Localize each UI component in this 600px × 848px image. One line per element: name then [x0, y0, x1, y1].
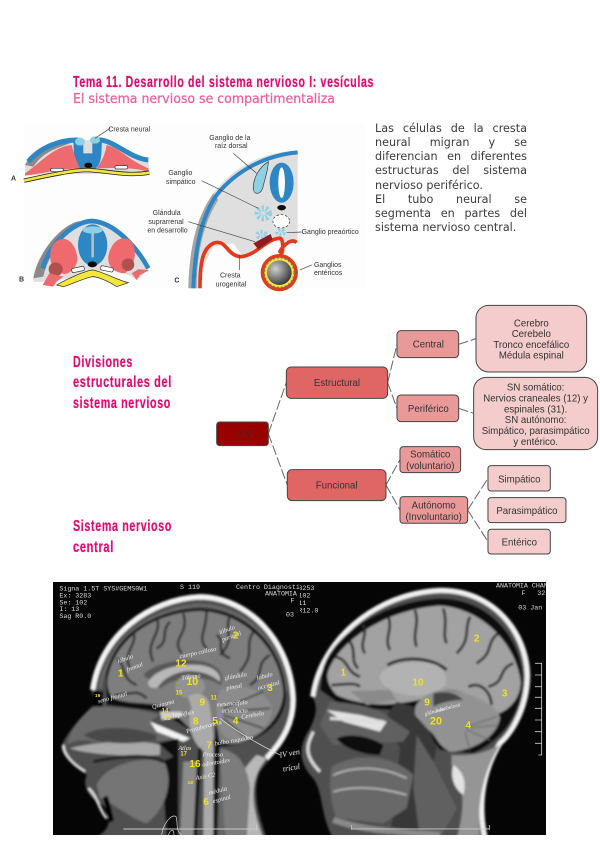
ruler [123, 825, 257, 830]
box: Entérico: Entérico [502, 538, 537, 549]
structure numbers: 17 [180, 752, 188, 758]
box: peripheral nervous system parts [474, 377, 598, 450]
handwritten labels: pineal [225, 682, 243, 692]
handwritten label: glándula [424, 707, 445, 718]
diagram labels: suprarrenal [148, 219, 184, 226]
structure numbers: 10 [186, 676, 198, 688]
box: peripheral nervous system parts: SN somático: [507, 382, 564, 393]
paragraph: neural crest and neural tube: sistema nervioso central. [375, 221, 516, 234]
section heading: divisiones estructurales: estructurales del [73, 374, 172, 391]
section heading: divisiones estructurales: sistema nervioso [73, 395, 171, 412]
handwritten labels: Cerebelo [241, 710, 265, 721]
box: peripheral nervous system parts: Simpático, parasimpático [482, 426, 590, 437]
embryo diagrams: neural crest migration [11, 125, 365, 291]
box: SN [217, 422, 268, 446]
structure numbers: 4 [466, 721, 472, 732]
diagram B [33, 219, 149, 287]
handwritten labels: occipital [257, 679, 280, 692]
structure numbers: 16 [189, 759, 201, 770]
box: Funcional: Funcional [316, 481, 358, 492]
paragraph: neural crest and neural tube: nervioso periférico. [375, 179, 483, 192]
scan header text: F [291, 596, 295, 604]
handwritten labels: acueducto [222, 707, 248, 714]
structure numbers: 19 [95, 693, 101, 699]
diagram labels: Glándula [153, 210, 181, 217]
box: Somático: Somático [410, 449, 450, 460]
title: Tema 11. Desarrollo del sistema nervioso I: vesículas [73, 74, 374, 91]
handwritten labels: Tálamo [181, 672, 201, 682]
box: Estructural [286, 367, 388, 398]
ruler [352, 663, 542, 830]
handwritten labels [97, 624, 305, 805]
box: peripheral nervous system parts: Nervios craneales (12) y [483, 393, 588, 404]
box: Periférico: Periférico [408, 404, 449, 415]
structure numbers: 1 [341, 668, 347, 679]
scan header text: I: 13 [59, 605, 79, 613]
handwritten labels: glándula [224, 671, 248, 682]
structure numbers: 4 [233, 716, 239, 727]
scan header text: Signa 1.5T SYS#GEMS0W1 [59, 585, 147, 593]
handwritten labels: seno frontal [97, 691, 128, 705]
scan header text [300, 583, 546, 612]
handwritten labels: odontoides [202, 757, 231, 769]
scan header text: Centro Diagnostic [236, 583, 304, 591]
diagram labels: B [19, 277, 24, 284]
scan header text: 11 [298, 599, 306, 607]
structure numbers: 6 [203, 797, 209, 808]
scan header text: S 119 [180, 583, 200, 591]
handwritten label [424, 704, 460, 717]
box: Entérico [488, 529, 550, 554]
handwritten labels: hipófisis [172, 709, 195, 720]
box: central nervous system parts: Tronco encefálico [493, 340, 569, 351]
diagram labels: Cresta [220, 272, 241, 279]
section heading: sistema nervioso central: Sistema nervioso [73, 518, 172, 535]
box: Autónomo: Autónomo [412, 500, 456, 511]
box: Parasimpático: Parasimpático [496, 506, 558, 517]
structure numbers: 15 [176, 691, 183, 697]
box: Periférico [397, 395, 459, 422]
box: Central [397, 331, 459, 358]
scan header text: 102 [298, 591, 310, 599]
handwritten labels: lóbulo [117, 653, 134, 665]
box: SN: SN [236, 429, 249, 440]
diagram labels: Ganglios [314, 262, 342, 269]
handwritten labels: mesencéfalo [216, 699, 248, 709]
handwritten labels: frontal [126, 661, 144, 674]
scan header text: ANATOMIA CHAN [496, 582, 548, 590]
section heading: sistema nervioso central [73, 518, 172, 556]
diagram labels: Ganglio preaórtico [302, 229, 359, 236]
box: Somático [400, 447, 461, 473]
scan header text [59, 583, 304, 620]
paragraph: neural crest and neural tube [375, 122, 527, 234]
scan header text: Sag R0.0 [59, 612, 91, 620]
paragraph: neural crest and neural tube: estructuras del sistema [375, 164, 527, 177]
box: Somático: (voluntario) [406, 461, 454, 472]
diagram labels: entéricos [314, 270, 343, 277]
box: peripheral nervous system parts: y entérico. [513, 437, 558, 448]
diagram C [11, 126, 359, 291]
handwritten labels: Protuberancia [184, 719, 223, 736]
section heading: divisiones estructurales: Divisiones [73, 354, 133, 371]
box: central nervous system parts: Médula espinal [499, 351, 564, 362]
paragraph: neural crest and neural tube: Las células de la cresta [375, 122, 527, 135]
handwritten labels: IV ven- [278, 747, 303, 760]
scan header text: R12.0 [298, 606, 318, 614]
scan header text: F [522, 589, 526, 597]
handwritten labels: Axis C2 [194, 771, 217, 782]
MRI right: annotated scan [298, 582, 550, 838]
diagram labels: en desarrollo [147, 227, 188, 234]
box: peripheral nervous system parts: SN autónomo: [505, 415, 567, 426]
handwritten labels: parietal [220, 630, 242, 644]
box: central nervous system parts [476, 305, 587, 372]
diagram labels: Ganglio [168, 170, 193, 177]
handwritten labels: espinal [212, 794, 232, 805]
box: peripheral nervous system parts: espinales (31). [504, 404, 567, 415]
scan header text: 03 [286, 611, 294, 619]
scan header text: 03 Jan 0 [518, 604, 550, 612]
section heading: divisiones estructurales [73, 354, 172, 412]
structure numbers: 20 [430, 716, 442, 728]
structure numbers: 7 [207, 740, 213, 751]
paragraph: neural crest and neural tube: neural migran y se [375, 136, 527, 149]
structure numbers: 10 [412, 678, 424, 689]
structure numbers: 9 [424, 697, 430, 708]
box: Autónomo: (Involuntario) [405, 512, 462, 523]
structure numbers: 2 [474, 633, 480, 644]
handwritten labels: lóbulo [218, 624, 236, 636]
paragraph: neural crest and neural tube: El tubo neural se [375, 193, 527, 206]
structure numbers: 3 [502, 689, 508, 700]
structure numbers: 9 [200, 697, 206, 708]
handwritten labels: bulbo raquídeo [214, 734, 254, 748]
scan header text: 3253 [298, 584, 314, 592]
box: Central: Central [413, 340, 444, 351]
handwritten label: cerebelosa [436, 702, 461, 714]
scan header text: Ex: 3283 [59, 591, 91, 599]
paragraph: neural crest and neural tube: diferencian en diferentes [375, 150, 527, 163]
diagram labels: simpático [166, 179, 196, 186]
box: Autónomo [400, 497, 468, 523]
diagram labels: Ganglio de la [209, 135, 251, 142]
diagram labels: A [11, 176, 16, 183]
structure numbers [95, 630, 273, 808]
handwritten labels: Proceso [202, 752, 223, 759]
structure numbers [341, 633, 508, 732]
scan header text: Se: 102 [59, 598, 87, 606]
structure numbers: 8 [193, 717, 199, 728]
box: Funcional [287, 470, 386, 501]
handwritten labels: Quiasma [151, 698, 175, 711]
MRI left: annotated midsagittal scan [59, 583, 305, 838]
diagram labels: C [174, 278, 179, 285]
box: Estructural: Estructural [314, 378, 360, 389]
diagram labels [11, 126, 359, 288]
subtitle: El sistema nervioso se compartimentaliza [73, 91, 335, 107]
diagram A [24, 136, 150, 181]
structure numbers: 3 [267, 683, 273, 694]
structure numbers: 14 [162, 709, 169, 715]
diagram labels: raíz dorsal [215, 143, 248, 150]
structure numbers: 2 [233, 630, 239, 641]
box: Simpático: Simpático [498, 474, 541, 485]
flow chart: divisions of the nervous system [217, 305, 598, 554]
handwritten labels: médula [208, 785, 228, 797]
handwritten labels: trículo [282, 761, 305, 774]
box: Simpático [488, 466, 550, 491]
structure numbers: 12 [175, 658, 187, 669]
scan header text: ANATOMIA [265, 590, 297, 598]
section heading: sistema nervioso central: central [73, 539, 114, 556]
handwritten labels: lóbulo [256, 671, 273, 682]
box: Parasimpático [488, 498, 566, 523]
structure numbers: 5 [212, 716, 218, 727]
handwritten labels: Atlas [177, 745, 192, 752]
box: central nervous system parts: Cerebelo [512, 329, 551, 340]
handwritten labels: cuerpo calloso [179, 646, 217, 660]
structure numbers: 11 [210, 695, 217, 701]
MRI panel: annotated sagittal brain scans [53, 582, 550, 838]
structure numbers: 18 [188, 780, 193, 786]
paragraph: neural crest and neural tube: segmenta en partes del [375, 207, 527, 220]
structure numbers: 13 [164, 716, 171, 722]
diagram labels: urogenital [216, 281, 247, 288]
box: central nervous system parts: Cerebro [514, 318, 549, 329]
diagram labels: Cresta neural [108, 126, 151, 133]
structure numbers: 1 [118, 668, 124, 679]
scan header text: 32 [537, 589, 545, 597]
